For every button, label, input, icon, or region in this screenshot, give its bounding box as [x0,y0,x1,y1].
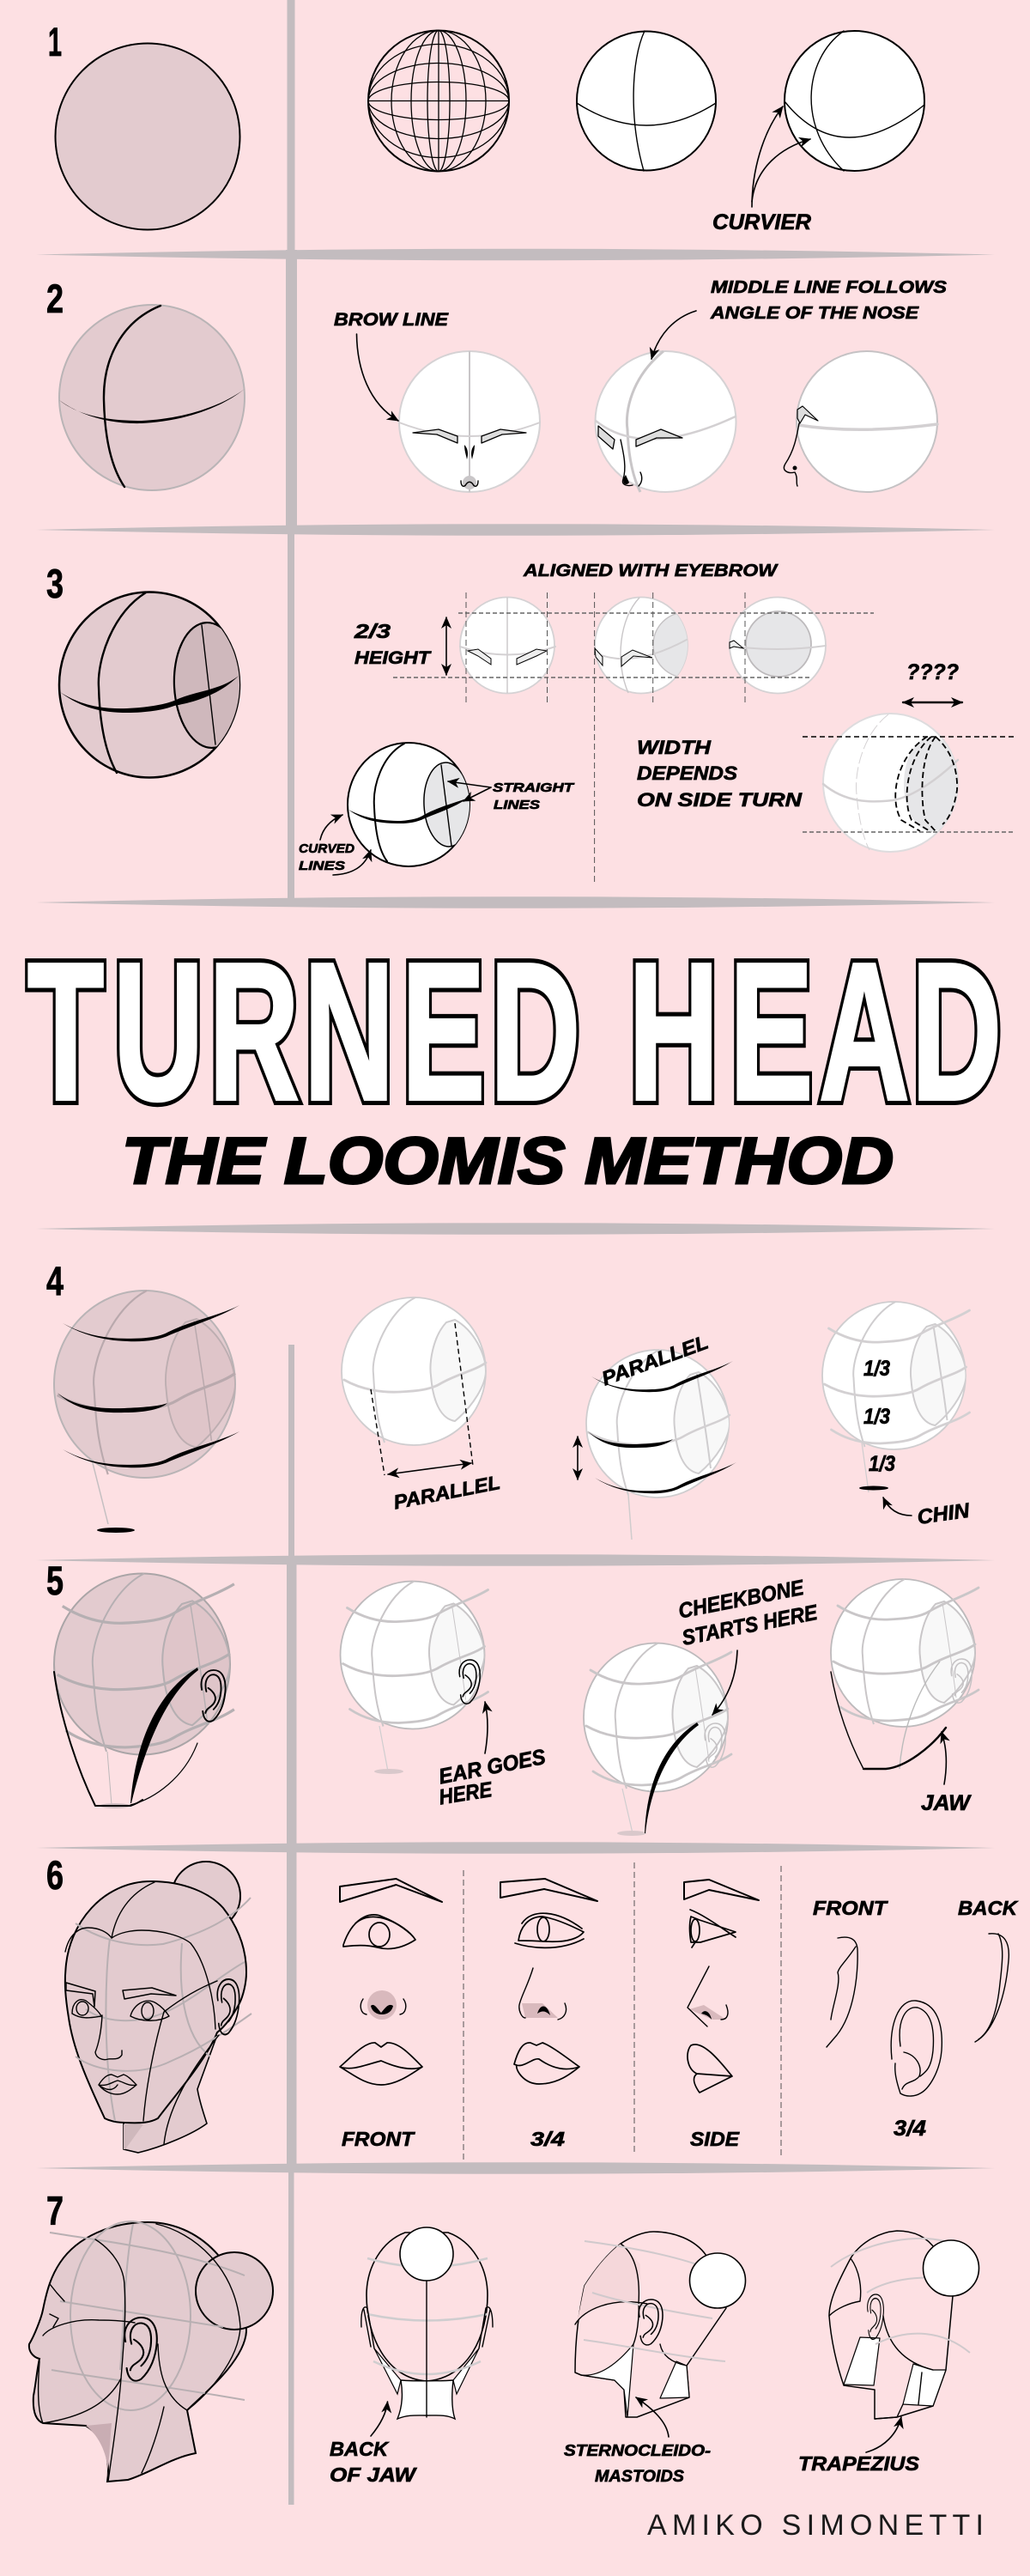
nose: front [360,1990,406,2020]
label: straight lines: STRAIGHT [493,781,575,795]
label: middle line follows angle of the nose [710,278,948,323]
arrow to chin [883,1498,912,1516]
turned sphere with curved lines [785,31,924,171]
step number 4: 4 [46,1258,64,1303]
brow: side [684,1880,759,1900]
head with ear placement [340,1582,488,1774]
step number 3: 3 [46,561,64,606]
alignment guide lines [393,613,874,677]
label: sternocleidomastoids: STERNOCLEIDO- [564,2442,711,2459]
trapezius head [829,2231,978,2419]
lips: front [340,2043,422,2085]
ear: three quarter view [891,2001,942,2096]
author credit: AMIKO SIMONETTI [647,2509,984,2542]
head with straight and curved lines [348,743,473,866]
nose: three quarter [519,1968,566,2020]
title: TURNED HEAD [27,922,1002,1141]
head with width options [823,714,959,852]
label: width depends on side turn [637,737,803,811]
label: curved lines: CURVED [299,841,354,856]
three quarter face on sphere [596,351,736,492]
back of head [361,2227,493,2419]
arrow to middle line [651,311,696,359]
labels: thirds: 1/3 [863,1357,890,1381]
head divided in thirds [822,1302,970,1492]
label: width depends on side turn: WIDTH [637,737,712,758]
aligned head: three quarter [594,596,688,694]
ear: front view [827,1937,857,2047]
arrow: trapezius [866,2417,901,2452]
label: ear goes here: EAR GOES [437,1745,548,1789]
step number 1: 1 [48,19,62,64]
label: cheekbone starts here [676,1576,821,1650]
arrow: back of jaw [371,2402,388,2436]
nose: side [688,1966,728,2026]
panel: step 7 [29,2188,979,2486]
shaded sphere with centre lines [59,305,245,490]
label: middle line follows angle of the nose: ANGLE OF THE NOSE [710,304,919,323]
label: back of jaw: OF JAW [330,2464,418,2486]
label: ear 3/4: 3/4 [894,2117,926,2141]
label: aligned with eyebrow: ALIGNED WITH EYEBROW [523,562,779,580]
label: 2/3 height: 2/3 [354,620,391,642]
shaded sphere with side plane [59,592,248,778]
shaded head with jaw and ear [54,1573,234,1808]
arrow: jaw [942,1732,946,1784]
panel: step 3 [46,561,1015,882]
label: parallel (rotated): PARALLEL [598,1331,712,1389]
labels: thirds: 1/3 [869,1452,895,1476]
label: jaw: JAW [921,1791,972,1815]
double arrow: width [903,702,962,703]
label: sternocleidomastoids: MASTOIDS [595,2468,684,2486]
feature dividers [464,1862,781,2160]
label: cheekbone starts here: STARTS HERE [680,1601,821,1650]
label: ear goes here [437,1745,548,1809]
panel: step 6 [46,1852,1018,2160]
sphere with latitude and longitude grid [368,31,509,172]
panel: step 1 [48,19,924,234]
horizontal guide lines: width [803,737,1015,832]
aligned head: side [730,598,826,694]
step number 6: 6 [46,1852,64,1898]
panel: step 5 [46,1558,978,1836]
label: ear goes here: HERE [437,1777,494,1809]
label: ear back: BACK [958,1897,1018,1919]
front view face on sphere [399,351,540,492]
label: 2/3 height: HEIGHT [354,648,432,668]
head with cheekbone line [584,1643,731,1836]
label: side: SIDE [690,2128,740,2150]
label: back of jaw [330,2438,418,2486]
label: curved lines [299,841,354,873]
subtitle: THE LOOMIS METHOD [122,1125,894,1198]
shaded head with three black lines [54,1291,239,1533]
head with facial features and bun [65,1862,251,2153]
label: straight lines: LINES [494,798,540,812]
three quarter features [500,1879,597,2084]
label: back of jaw: BACK [330,2438,389,2460]
arrow to brow line [357,334,398,421]
label: trapezius: TRAPEZIUS [798,2452,920,2475]
aligned head: front [460,598,555,694]
eye: front [343,1915,415,1949]
label: sternocleidomastoids [564,2442,711,2486]
arrows: curved lines [320,815,371,875]
arrows: straight lines [448,781,491,801]
panel: step 4 [46,1258,972,1540]
step number 2: 2 [46,276,64,321]
front view features [340,1879,442,2085]
arrow: ear goes here [485,1702,488,1753]
label: 3/4: 3/4 [530,2128,565,2150]
lips: side [688,2044,732,2093]
eye: side [690,1910,736,1947]
label: curvier: CURVIER [712,210,811,234]
panel: step 2 [46,276,948,492]
label: straight lines [493,781,575,812]
label: width depends on side turn: DEPENDS [637,762,737,784]
sternocleidomastoid head [575,2232,745,2417]
label: brow line: BROW LINE [334,310,449,330]
label: question marks: ???? [906,660,959,684]
sphere with centre lines [577,31,716,171]
head with parallel curves [578,1350,736,1540]
label: width depends on side turn: ON SIDE TURN [637,789,803,811]
label: parallel: PARALLEL [391,1471,502,1514]
step number 7: 7 [46,2188,64,2233]
side view features [684,1880,759,2093]
step number 5: 5 [46,1558,64,1603]
label: ear front: FRONT [813,1897,888,1919]
arrows to curved lines [752,106,810,207]
brow: front [340,1879,442,1902]
label: front: FRONT [342,2128,415,2150]
side view face on sphere [784,351,937,492]
title: TURNED HEAD [27,922,1002,1141]
brow: three quarter [500,1879,597,1901]
vertical guide lines [466,592,745,882]
shaded sphere [55,43,240,230]
arrow: cheekbone starts here [712,1650,737,1715]
label: chin: CHIN [916,1499,972,1529]
lips: three quarter [514,2043,579,2084]
label: middle line follows angle of the nose: MIDDLE LINE FOLLOWS [711,278,948,297]
arrow: sternocleidomastoids [636,2397,669,2437]
label: curved lines: LINES [299,859,345,873]
head with jaw line [831,1579,978,1769]
label: 2/3 height [354,620,432,668]
labels: thirds: 1/3 [863,1405,890,1429]
double arrow: height [445,617,447,675]
shaded side view head [29,2221,273,2482]
labels: thirds [863,1357,895,1476]
label: cheekbone starts here: CHEEKBONE [676,1576,807,1624]
eye: three quarter [515,1913,584,1947]
ear: back view [975,1934,1009,2042]
head with dashed parallel guides [342,1297,486,1475]
